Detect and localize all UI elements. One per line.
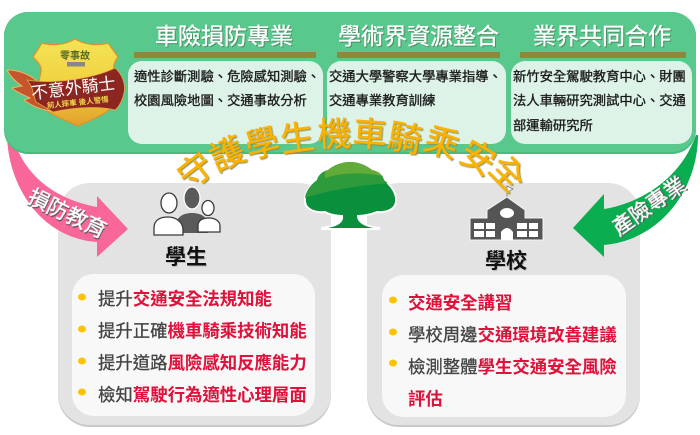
text box: vehicle insurance: 適性診斷測驗、危險感知測驗、 xyxy=(134,68,320,84)
title: arched slogan: 機 xyxy=(317,115,352,155)
title: arched slogan: 車 xyxy=(351,115,388,155)
badge slogan: 前人摔車 後人警惕 xyxy=(46,94,110,110)
text box: vehicle insurance: 校園風險地圖、交通事故分析 xyxy=(134,92,307,108)
student list: 提升交通安全法規知能 xyxy=(98,289,272,309)
student list xyxy=(78,289,307,405)
icon: tree xyxy=(304,162,397,230)
title: arched slogan: 生 xyxy=(278,118,317,160)
shield xyxy=(33,39,118,126)
student list box xyxy=(72,274,315,416)
title: arched slogan: 全 xyxy=(481,149,532,200)
school list xyxy=(389,293,617,409)
bullets xyxy=(78,294,86,396)
text box: industry xyxy=(511,61,692,144)
student list: 提升道路風險感知反應能力 xyxy=(98,353,307,373)
icon: school xyxy=(470,186,543,240)
badge title: 不意外騎士 xyxy=(30,74,117,103)
arrow: green to school xyxy=(573,135,698,257)
title: arched slogan: 騎 xyxy=(385,118,425,161)
logo text: 零事故 xyxy=(60,49,90,62)
title: arched slogan: 乘 xyxy=(419,120,463,167)
heading: school: 學校 xyxy=(485,249,527,273)
icon: rider badge xyxy=(7,39,125,126)
text box: industry: 部運輸研究所 xyxy=(513,118,593,133)
text box: vehicle insurance xyxy=(128,61,323,144)
school list: 交通安全講習 xyxy=(408,293,512,313)
arrow: pink to students xyxy=(7,135,128,257)
school list: 檢測整體學生交通安全風險 xyxy=(408,357,617,377)
title: arched slogan: 學 xyxy=(241,122,283,167)
school list: 學校周邊交通環境改善建議 xyxy=(408,325,617,345)
student list: 檢知駕駛行為適性心理層面 xyxy=(98,385,307,405)
text box: academic xyxy=(327,61,506,144)
heading: academic: 學術界資源整合 xyxy=(338,23,499,49)
icon: students xyxy=(154,187,220,235)
bullets xyxy=(389,296,397,366)
panel: school xyxy=(367,183,640,427)
divider bars xyxy=(134,52,686,58)
heading: vehicle insurance: 車險損防專業 xyxy=(155,23,293,49)
title: arched slogan: 守 xyxy=(171,146,221,197)
title: arched slogan: 護 xyxy=(204,131,251,179)
wings xyxy=(7,70,52,111)
panel: top resources xyxy=(4,12,696,154)
arrow label: loss prevention education: 損防教育 xyxy=(24,185,110,243)
text box: academic: 交通專業教育訓練 xyxy=(329,92,435,108)
text box: industry: 新竹安全駕駛教育中心、財團 xyxy=(513,69,686,84)
school list box xyxy=(382,275,626,417)
heading: students: 學生 xyxy=(165,246,207,269)
text box: academic: 交通大學警察大學專業指導、 xyxy=(329,68,502,84)
student list: 提升正確機車騎乘技術知能 xyxy=(98,321,307,341)
title: arched slogan xyxy=(171,115,532,200)
school list: 評估 xyxy=(408,389,443,409)
arrow label: insurance expertise: 產險專業 xyxy=(608,173,690,240)
banner xyxy=(27,68,125,112)
title: arched slogan: 安 xyxy=(453,134,502,183)
text box: industry: 法人車輛研究測試中心、交通 xyxy=(513,92,686,108)
panel: student xyxy=(58,183,331,427)
heading: industry: 業界共同合作 xyxy=(533,23,671,49)
